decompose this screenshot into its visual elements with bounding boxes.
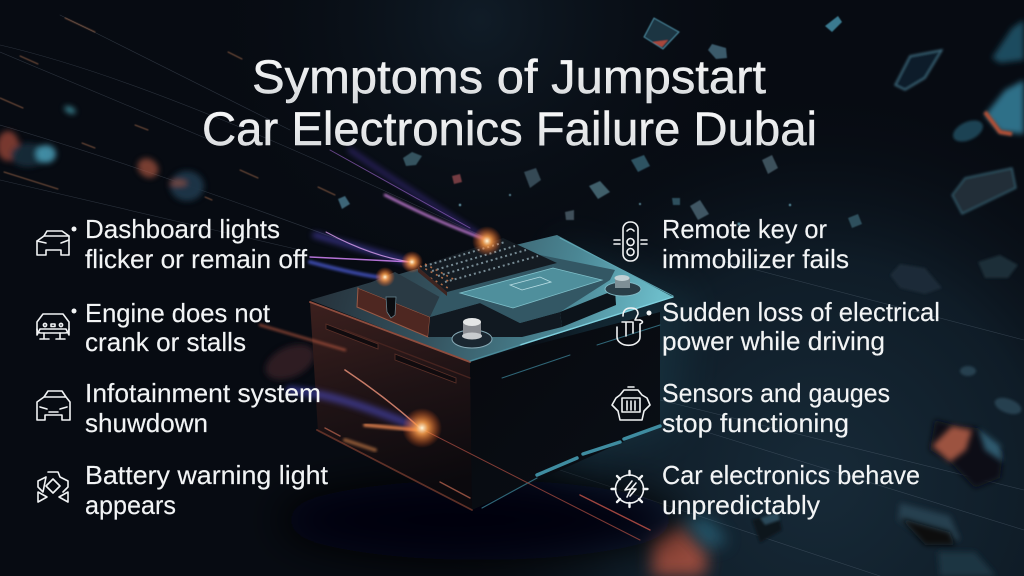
symptom: battery warning bbox=[38, 460, 329, 520]
symptom: power loss bbox=[617, 297, 940, 356]
sparks: lower streaks bbox=[260, 325, 650, 540]
battery: top face bbox=[310, 235, 673, 362]
icon: warning diamond bbox=[38, 472, 68, 502]
symptom: infotainment: Infotainment system bbox=[85, 378, 321, 408]
battery: left side clips bbox=[326, 324, 456, 383]
symptom: power loss: power while driving bbox=[662, 326, 885, 356]
debris: lower right fragments bbox=[652, 366, 1024, 576]
sparks: glow points bbox=[375, 226, 502, 448]
battery: edge highlights bbox=[310, 238, 673, 510]
symptom: infotainment bbox=[37, 378, 321, 438]
symptom: erratic electronics: unpredictably bbox=[662, 490, 820, 520]
icon: plug hook with bullet bbox=[617, 308, 652, 345]
debris: top right fragments bbox=[644, 16, 1024, 294]
battery: terminal rear bbox=[605, 275, 641, 296]
symptom: dashboard lights: flicker or remain off bbox=[85, 244, 308, 274]
symptom: sensors: stop functioning bbox=[662, 408, 849, 438]
symptom: erratic electronics: Car electronics behave bbox=[662, 460, 920, 490]
symptom: dashboard lights bbox=[37, 214, 308, 274]
icon: car front bbox=[37, 391, 70, 420]
battery: cyan glow bbox=[560, 240, 690, 470]
icon: engine dashboard with bullet bbox=[37, 308, 76, 339]
battery: terminal front bbox=[452, 318, 492, 348]
battery: label plate bbox=[460, 268, 602, 308]
symptom: sensors: Sensors and gauges bbox=[662, 378, 890, 408]
symptom: remote key: Remote key or bbox=[662, 214, 827, 244]
icon: gear with lightning bolt bbox=[612, 471, 648, 507]
sparks: top streaks bbox=[310, 150, 487, 278]
symptom: engine: crank or stalls bbox=[85, 327, 246, 357]
symptom: engine bbox=[37, 298, 271, 357]
symptom: remote key bbox=[614, 214, 849, 274]
battery: raised lid block bbox=[357, 288, 430, 337]
battery: left side bbox=[310, 302, 472, 510]
symptom: sensors bbox=[612, 378, 890, 438]
icon: key fob bbox=[614, 222, 647, 261]
symptom: dashboard lights: Dashboard lights bbox=[85, 214, 280, 244]
symptom: battery warning: appears bbox=[85, 490, 176, 520]
title bbox=[202, 50, 817, 155]
electric sparks bbox=[260, 150, 650, 540]
symptom: remote key: immobilizer fails bbox=[662, 244, 849, 274]
title: Symptoms of Jumpstart bbox=[252, 50, 766, 103]
icon: car front with bullet bbox=[37, 226, 76, 255]
symptom: erratic electronics bbox=[612, 460, 920, 520]
symptom: engine: Engine does not bbox=[85, 298, 271, 328]
battery: notch bbox=[386, 297, 396, 318]
ground shadow bbox=[280, 480, 680, 560]
title: Car Electronics Failure Dubai bbox=[202, 102, 817, 155]
battery: right side bbox=[470, 312, 660, 510]
debris: small mid fragments bbox=[338, 152, 862, 413]
symptom: power loss: Sudden loss of electrical bbox=[662, 297, 940, 327]
icon: engine block bbox=[612, 387, 650, 420]
car battery bbox=[310, 235, 690, 510]
symptom: battery warning: Battery warning light bbox=[85, 460, 329, 490]
symptom: infotainment: shuwdown bbox=[85, 408, 208, 438]
debris: blurred left fragments bbox=[0, 105, 320, 387]
battery: circuit module bbox=[418, 238, 557, 296]
